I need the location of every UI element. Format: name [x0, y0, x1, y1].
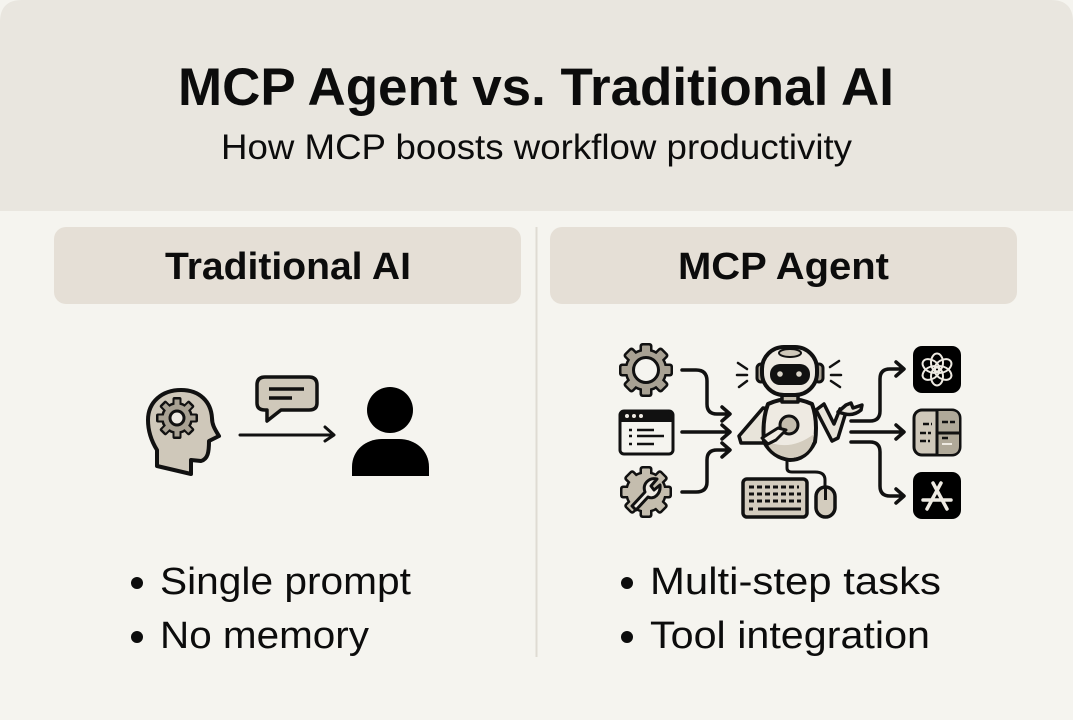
icon: speech bubble — [257, 377, 317, 421]
panel heading: MCP Agent — [550, 227, 1017, 304]
icon: keyboard — [743, 479, 807, 517]
arrows: robot to tools — [851, 362, 904, 503]
icon: head with gear — [148, 390, 219, 474]
bullet list: MCP Agent — [621, 561, 941, 657]
icon: person — [352, 387, 429, 476]
bullet list: MCP Agent: Multi-step tasks — [650, 561, 941, 603]
icon: mouse — [816, 487, 835, 517]
arrows: inputs to robot — [682, 370, 730, 492]
header band — [0, 0, 1073, 211]
bullet list: Traditional AI — [131, 561, 411, 657]
bullet list: Traditional AI: Single prompt — [160, 561, 411, 603]
icon: app store tile — [913, 472, 961, 519]
subtitle: How MCP boosts workflow productivity — [221, 128, 853, 167]
bullet list: Traditional AI: No memory — [160, 615, 369, 657]
icon: browser window — [620, 410, 673, 454]
bullet list: MCP Agent: Tool integration — [650, 615, 930, 657]
arrow: prompt to user — [240, 427, 334, 441]
icon: swirl app tile — [913, 346, 961, 393]
panel heading: Traditional AI — [54, 227, 521, 304]
icon: wrench gear — [620, 466, 672, 518]
icon: settings gear — [619, 343, 673, 397]
icon: code split tile — [914, 410, 960, 455]
icon: robot — [737, 347, 862, 487]
panel heading: Traditional AI: Traditional AI — [165, 246, 411, 288]
title: MCP Agent vs. Traditional AI — [178, 58, 894, 117]
panel heading: MCP Agent: MCP Agent — [678, 246, 889, 288]
